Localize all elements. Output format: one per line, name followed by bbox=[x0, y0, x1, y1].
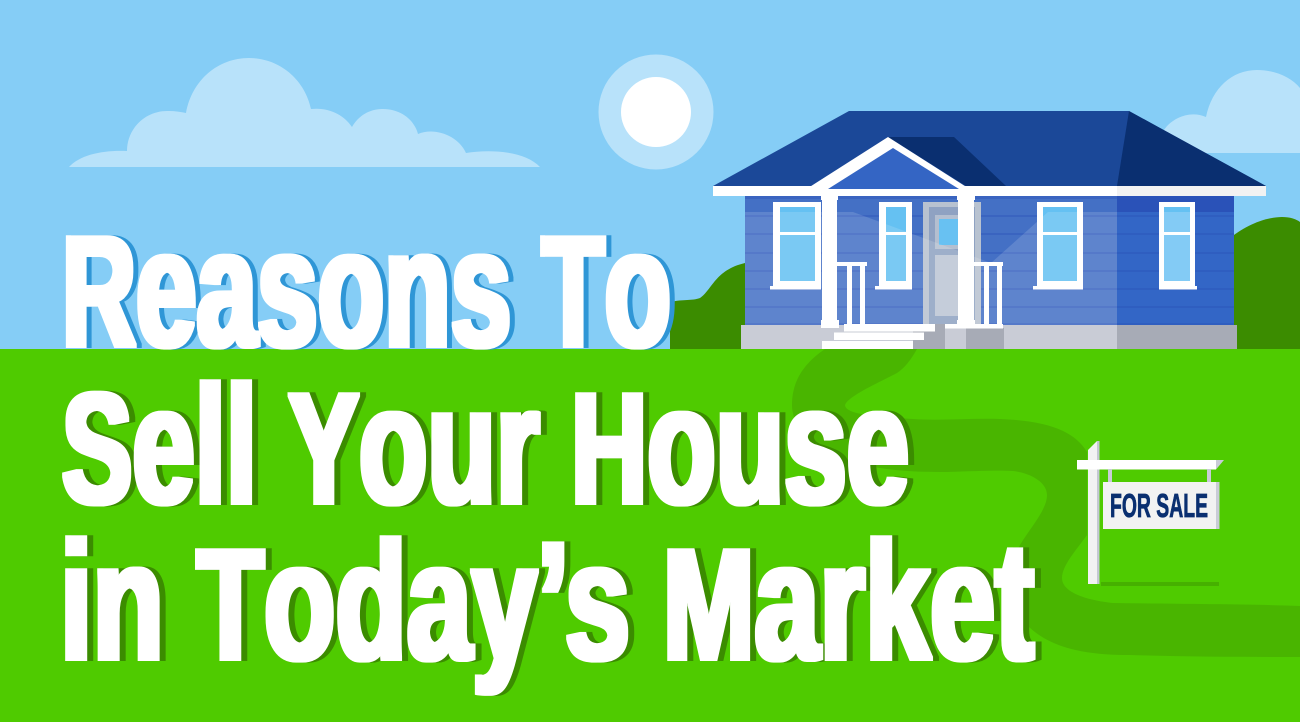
lawn bbox=[0, 349, 1300, 722]
sun bbox=[598, 54, 714, 170]
sign post bbox=[1088, 441, 1100, 584]
for sale sign bbox=[1077, 441, 1224, 586]
door bbox=[923, 202, 981, 324]
porch steps bbox=[822, 324, 1003, 349]
sign ground shadow bbox=[1101, 582, 1219, 586]
title line 3: in Today’s Market bbox=[60, 506, 1034, 696]
sign arm bbox=[1077, 460, 1224, 482]
porch columns bbox=[821, 196, 975, 328]
right window bbox=[1159, 202, 1197, 290]
house bbox=[713, 111, 1266, 349]
wall light overlay bbox=[745, 212, 1117, 325]
porch railings bbox=[837, 262, 1003, 325]
eaves fascia bbox=[713, 186, 1266, 196]
foundation bbox=[741, 324, 1237, 349]
walls bbox=[745, 196, 1234, 326]
cloud: right bbox=[1164, 70, 1300, 153]
sign board: FOR SALE bbox=[1110, 487, 1208, 524]
windows bbox=[770, 202, 1083, 290]
sign board bbox=[1103, 482, 1220, 529]
hills bbox=[670, 217, 1300, 350]
roof bbox=[713, 111, 1266, 186]
garden path bbox=[792, 349, 1300, 657]
porch gable bbox=[808, 137, 968, 196]
title line 2: Sell Your House bbox=[62, 350, 909, 540]
cloud: left bbox=[69, 58, 540, 167]
title bbox=[60, 193, 1034, 696]
title line 1: Reasons To bbox=[62, 193, 671, 383]
